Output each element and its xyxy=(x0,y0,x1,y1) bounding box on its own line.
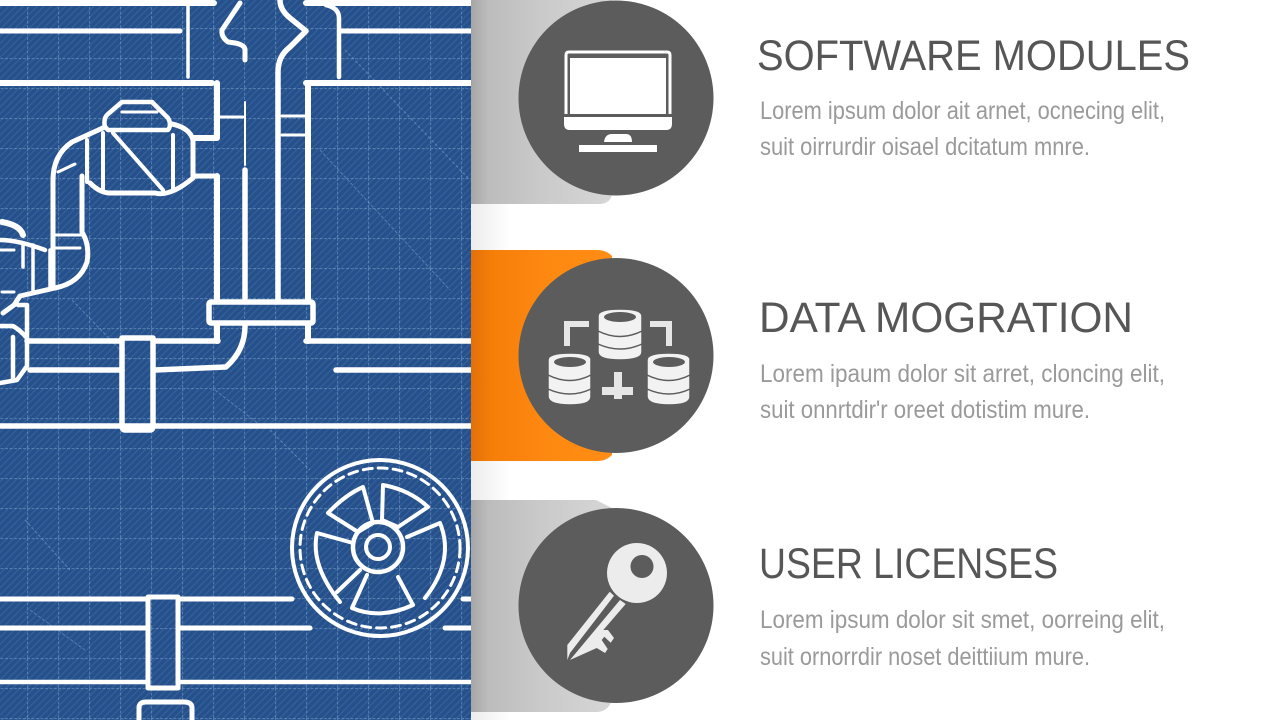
database top xyxy=(598,309,642,360)
heading: SOFTWARE MODULES xyxy=(757,32,1190,80)
connectors and plus sign xyxy=(567,324,669,399)
database right xyxy=(647,353,690,405)
text block: data migration xyxy=(759,294,1165,424)
pipework: upper assembly xyxy=(0,0,471,430)
icon: key in dark circle xyxy=(518,508,714,703)
panel: software modules band xyxy=(471,0,612,204)
body text: Lorem ipsum dolor ait arnet, ocnecing elit, xyxy=(760,97,1165,125)
heading: DATA MOGRATION xyxy=(759,294,1133,342)
icon: databases in dark circle xyxy=(518,258,714,453)
body text: suit ornorrdir noset deittiium mure. xyxy=(760,643,1090,671)
panel: blueprint illustration xyxy=(0,0,471,720)
pipework: lower assembly xyxy=(0,597,471,720)
database left xyxy=(548,353,591,405)
body text: suit oirrurdir oisael dcitatum mnre. xyxy=(760,133,1090,161)
body text xyxy=(760,97,1165,161)
body text: Lorem ipsum dolor sit smet, oorreing elit, xyxy=(760,606,1165,634)
heading: USER LICENSES xyxy=(759,540,1058,588)
body text: suit onnrtdir'r oreet dotistim mure. xyxy=(760,396,1090,424)
body text xyxy=(760,360,1165,424)
shadow strips between bands xyxy=(471,204,511,720)
icon: blueprint wheel xyxy=(292,460,468,636)
text block: user licenses xyxy=(759,540,1165,671)
body text: Lorem ipaum dolor sit arret, cloncing elit, xyxy=(760,360,1165,388)
icon: valve and elbow pipe xyxy=(0,102,217,383)
text block: software modules xyxy=(757,32,1190,161)
icon: monitor in dark circle xyxy=(518,0,714,196)
body text xyxy=(760,606,1165,671)
panel: user licenses band xyxy=(471,500,612,712)
panel: data migration band xyxy=(471,250,612,461)
